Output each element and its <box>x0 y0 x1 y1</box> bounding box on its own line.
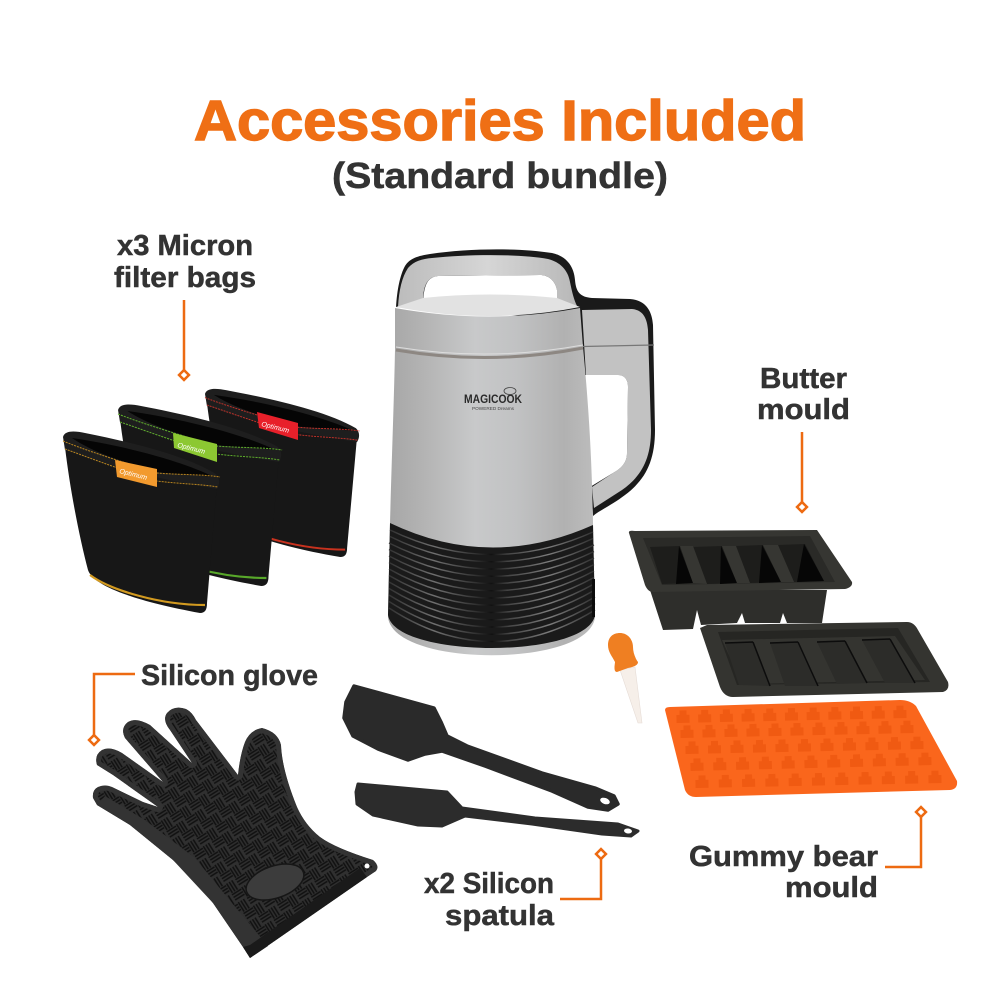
connector: spatula <box>560 849 606 899</box>
kettle logo: MAGICOOK <box>464 394 523 406</box>
silicon glove <box>93 708 377 958</box>
label: butter mould: Butter <box>760 363 847 395</box>
infographic canvas <box>62 98 958 958</box>
filter bag: orange: Optimum <box>119 468 148 482</box>
label: x2 silicon spatula <box>424 868 555 932</box>
filter bag: green: Optimum <box>177 442 206 456</box>
filter bag: red: Optimum <box>261 421 290 435</box>
filter bag: green <box>118 405 282 586</box>
spatula: large <box>344 686 618 810</box>
spatula: small <box>356 784 638 836</box>
kettle <box>388 249 655 655</box>
label: gummy bear mould: mould <box>785 872 878 904</box>
label: butter mould <box>757 363 850 426</box>
label: gummy bear mould <box>689 841 878 904</box>
filter bag: orange <box>63 432 220 613</box>
filter bag: red <box>205 389 360 557</box>
label: x2 silicon spatula: spatula <box>445 900 555 932</box>
label: x3 Micron filter bags <box>114 230 256 294</box>
label: x3 Micron filter bags: x3 Micron <box>117 230 253 262</box>
subtitle: (Standard bundle) <box>332 155 668 196</box>
label: x3 Micron filter bags: filter bags <box>114 262 256 294</box>
gummy bear mould <box>665 700 957 797</box>
connector: butter mould <box>797 432 807 512</box>
butter mould: deep tray <box>629 530 852 630</box>
kettle logo chef hat <box>504 388 516 394</box>
connector: gummy bear mould <box>885 807 926 867</box>
butter mould: flat tray <box>700 622 948 697</box>
title: Accessories Included <box>194 89 806 153</box>
label: gummy bear mould: Gummy bear <box>689 841 878 873</box>
label: x2 silicon spatula: x2 Silicon <box>424 868 554 900</box>
connector: filter bags <box>179 300 189 380</box>
label: silicon glove: Silicon glove <box>141 660 318 692</box>
connector: silicon glove <box>89 674 135 745</box>
dropper <box>608 633 642 723</box>
label: butter mould: mould <box>757 394 850 426</box>
kettle logo sub-line: POWERED Dreams <box>472 406 515 411</box>
